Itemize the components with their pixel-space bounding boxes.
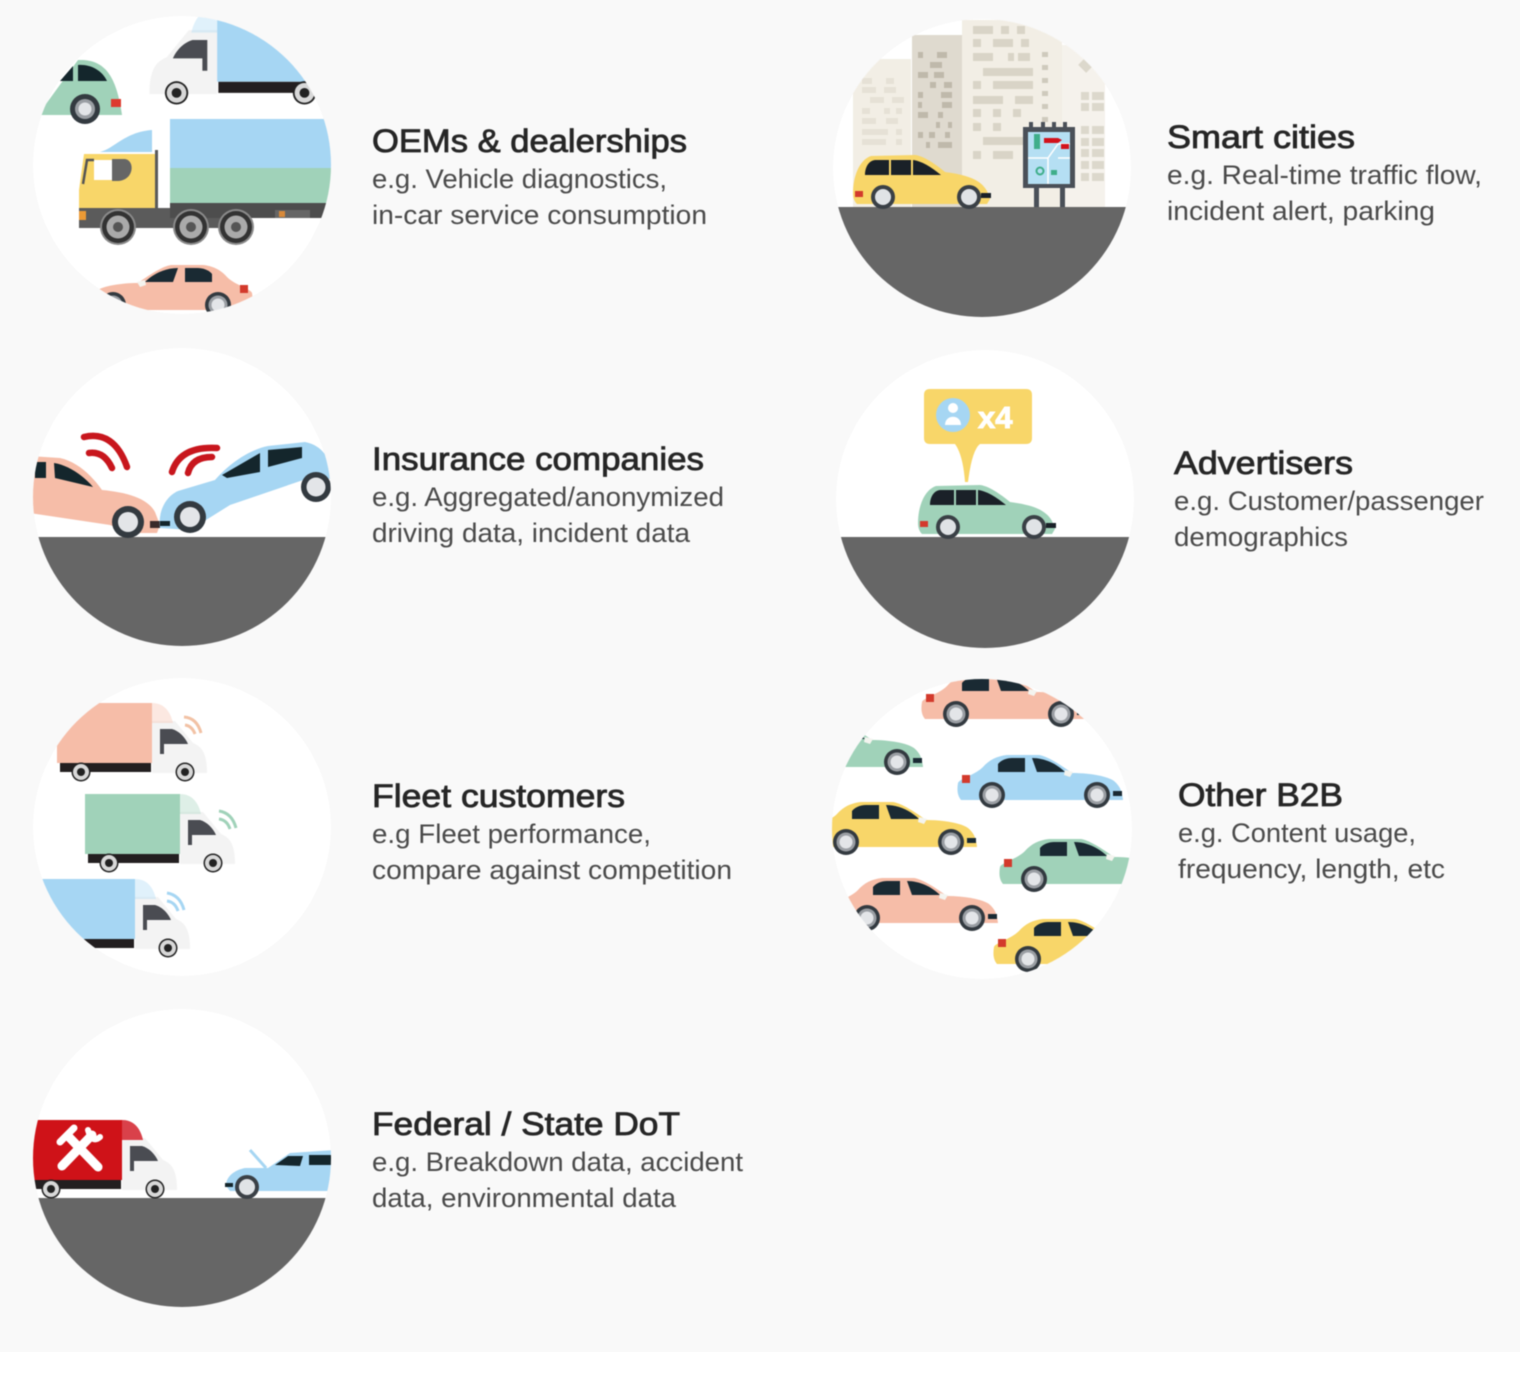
icon: green car partial — [845, 735, 924, 776]
description — [372, 482, 724, 548]
description — [372, 164, 707, 230]
heading: Other B2B — [1178, 777, 1343, 813]
illustration: connected vans — [42, 702, 238, 958]
icon: pink car — [832, 878, 998, 931]
heading: Fleet customers — [372, 778, 625, 814]
icon: green car — [38, 60, 122, 124]
description: data, environmental data — [372, 1183, 677, 1213]
description: driving data, incident data — [372, 518, 691, 548]
icon: traffic sign board — [1023, 122, 1075, 207]
heading: Advertisers — [1174, 445, 1353, 481]
callout: passenger count: x4 — [978, 400, 1013, 435]
panel: Advertisers — [840, 388, 1484, 649]
icon: blue car — [957, 755, 1123, 808]
icon: pink car — [30, 456, 162, 538]
icon: crossed tools — [60, 1128, 100, 1167]
panel: Other B2B — [831, 678, 1445, 973]
icon: blue car with open hood — [225, 1150, 335, 1199]
road — [830, 537, 1140, 652]
icon: green van — [85, 794, 236, 872]
description: e.g. Vehicle diagnostics, — [372, 164, 667, 194]
icon: green car — [999, 839, 1165, 892]
panel: OEMs & dealerships — [33, 8, 707, 318]
description: e.g. Content usage, — [1178, 818, 1416, 848]
icon: red signal waves — [84, 436, 217, 473]
icon: white van with blue box — [150, 16, 316, 106]
description: e.g. Breakdown data, accident — [372, 1147, 744, 1177]
icon: pink van — [57, 703, 207, 782]
illustration: city street — [830, 19, 1140, 322]
illustration: car and trucks — [33, 8, 335, 318]
icon: blue van — [40, 879, 190, 958]
description — [372, 819, 732, 885]
description — [1167, 160, 1482, 226]
icon: yellow car — [993, 919, 1159, 972]
icon: blue car — [160, 442, 335, 533]
icon: green car — [918, 485, 1056, 539]
buildings — [853, 20, 1105, 207]
heading: Federal / State DoT — [372, 1106, 680, 1142]
heading: Smart cities — [1167, 119, 1355, 155]
illustration: car with passenger bubble — [840, 388, 1130, 649]
description — [1178, 818, 1445, 884]
icon: pink car — [921, 674, 1087, 727]
description: e.g. Real-time traffic flow, — [1167, 160, 1482, 190]
heading: OEMs & dealerships — [372, 123, 687, 159]
panel: Smart cities — [830, 19, 1482, 322]
road — [830, 207, 1140, 322]
heading: Insurance companies — [372, 441, 704, 477]
illustration: car collision — [32, 432, 332, 647]
illustration: breakdown service — [32, 1119, 332, 1308]
panel: Fleet customers — [42, 702, 731, 958]
icon: red service van — [27, 1120, 177, 1198]
illustration: many cars — [831, 678, 1130, 973]
icon: pink car — [100, 264, 253, 312]
callout: passenger count — [924, 389, 1032, 482]
icon: big yellow truck — [79, 119, 335, 245]
description: demographics — [1174, 522, 1348, 552]
description: e.g. Aggregated/anonymized — [372, 482, 724, 512]
description: in-car service consumption — [372, 200, 707, 230]
description: frequency, length, etc — [1178, 854, 1445, 884]
description: e.g Fleet performance, — [372, 819, 651, 849]
road — [38, 536, 326, 647]
icon: yellow car — [853, 155, 991, 209]
description — [1174, 486, 1484, 552]
icon: yellow car — [811, 802, 977, 855]
description: incident alert, parking — [1167, 196, 1435, 226]
panel: Insurance companies — [32, 432, 723, 647]
description: e.g. Customer/passenger — [1174, 486, 1484, 516]
road — [38, 1197, 326, 1308]
description — [372, 1147, 744, 1213]
panel: Federal / State DoT — [32, 1110, 744, 1308]
description: compare against competition — [372, 855, 732, 885]
